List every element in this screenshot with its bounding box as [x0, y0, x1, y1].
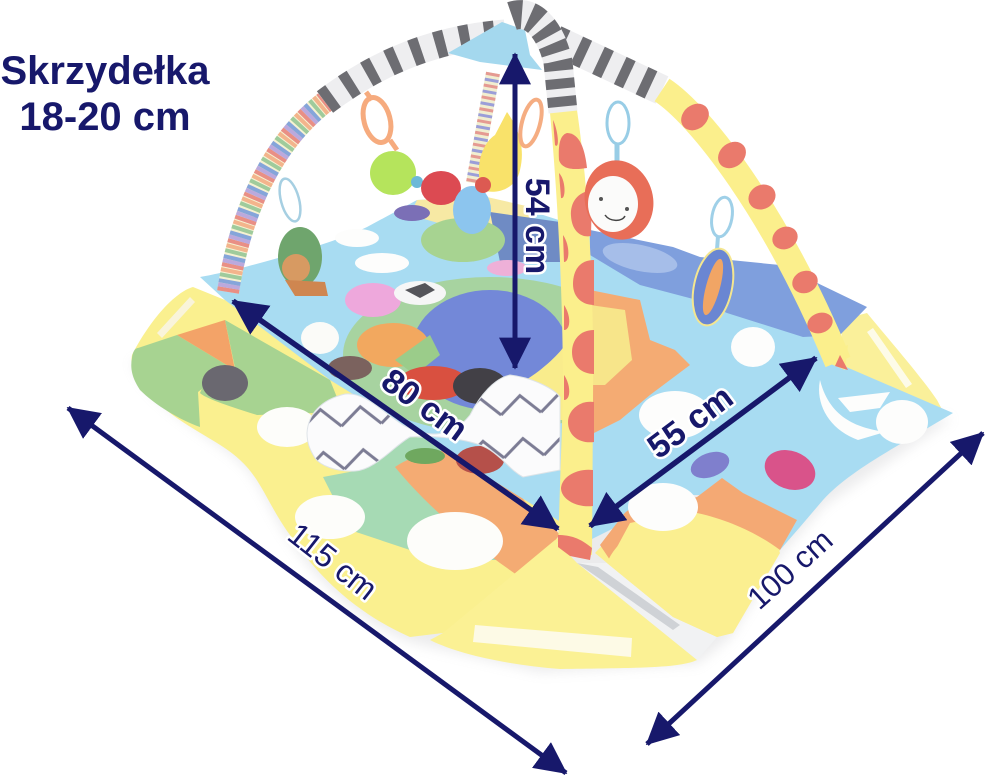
sheep	[202, 365, 248, 401]
arrow: 55 cm	[590, 358, 816, 526]
pig	[345, 283, 401, 317]
orange arc	[395, 450, 560, 577]
orange triangle	[177, 320, 235, 370]
toy: blue loop right	[709, 196, 735, 238]
plush toy	[357, 323, 429, 367]
toy: red crab	[421, 171, 461, 205]
brown toy	[328, 356, 372, 380]
surface	[200, 197, 953, 550]
toy: green bear	[278, 227, 322, 287]
toys	[276, 92, 740, 329]
back sea	[590, 230, 867, 337]
toy: green fish	[370, 151, 416, 195]
arrow: 100 cm: 100 cm	[740, 522, 839, 616]
pillow	[307, 375, 560, 477]
patch under pillow	[456, 446, 504, 474]
arrow: 80 cm	[233, 301, 558, 529]
cow	[394, 281, 446, 305]
toy: blue snail	[453, 186, 491, 234]
left green segment	[131, 335, 230, 427]
yellow near arch	[500, 440, 565, 530]
green ring	[343, 277, 637, 433]
toy: blue loop centre	[607, 102, 629, 144]
mat	[131, 197, 953, 669]
velcro left	[157, 297, 195, 338]
owl	[394, 205, 430, 221]
front arch	[550, 110, 594, 560]
hub	[448, 22, 542, 70]
toy: lion	[576, 153, 662, 247]
arrow: 115 cm	[68, 408, 566, 773]
right wedge yellow	[595, 500, 780, 637]
giraffe and lion panel	[590, 290, 690, 435]
left wedge base	[131, 287, 560, 637]
title: wings: Skrzydełka	[0, 49, 210, 93]
arrow: 80 cm: 80 cm	[374, 361, 475, 449]
right yellow flap	[840, 313, 945, 420]
velcro bottom	[473, 625, 632, 657]
clouds	[628, 483, 698, 531]
gap between flaps	[577, 563, 717, 660]
stork	[819, 380, 890, 440]
tree circle	[421, 218, 505, 262]
arrow: 100 cm	[647, 433, 983, 744]
yellow under arch	[500, 345, 565, 420]
pond	[412, 290, 568, 410]
right orange band	[600, 478, 797, 560]
toy: yellow duck	[479, 112, 522, 192]
left arch: zebra stripes	[325, 33, 505, 102]
middle green segment	[200, 320, 340, 415]
toy: blue loop left	[276, 176, 304, 224]
red bird	[759, 443, 821, 497]
bottom flap	[430, 540, 697, 669]
front arch: zebra	[512, 15, 563, 112]
title: wings: 18-20 cm	[19, 95, 191, 139]
whale	[600, 237, 680, 279]
back yellow and dark patch	[410, 197, 535, 240]
toy: book	[686, 245, 740, 329]
back arch	[473, 73, 493, 183]
arrow: 55 cm: 55 cm	[640, 378, 740, 466]
mat shadow	[132, 360, 953, 672]
butterfly	[687, 447, 733, 483]
pink patch	[487, 260, 527, 276]
arch body	[550, 110, 593, 555]
title: wings	[0, 49, 210, 139]
sheep small	[301, 322, 339, 354]
polka dots	[553, 120, 594, 560]
left arch: rainbow stripes	[228, 102, 325, 292]
arrow: 115 cm: 115 cm	[281, 516, 384, 607]
right flap velcro	[867, 328, 912, 388]
toy: orange ring	[358, 94, 396, 146]
right arch: yellow	[662, 90, 848, 370]
teal arc	[323, 437, 520, 560]
ladybird	[398, 366, 468, 400]
arrow: 54 cm: 54 cm	[518, 178, 556, 274]
toy: far orange ring	[516, 97, 546, 149]
right yellow redraw	[607, 513, 780, 637]
right arch: zebra	[555, 40, 662, 90]
